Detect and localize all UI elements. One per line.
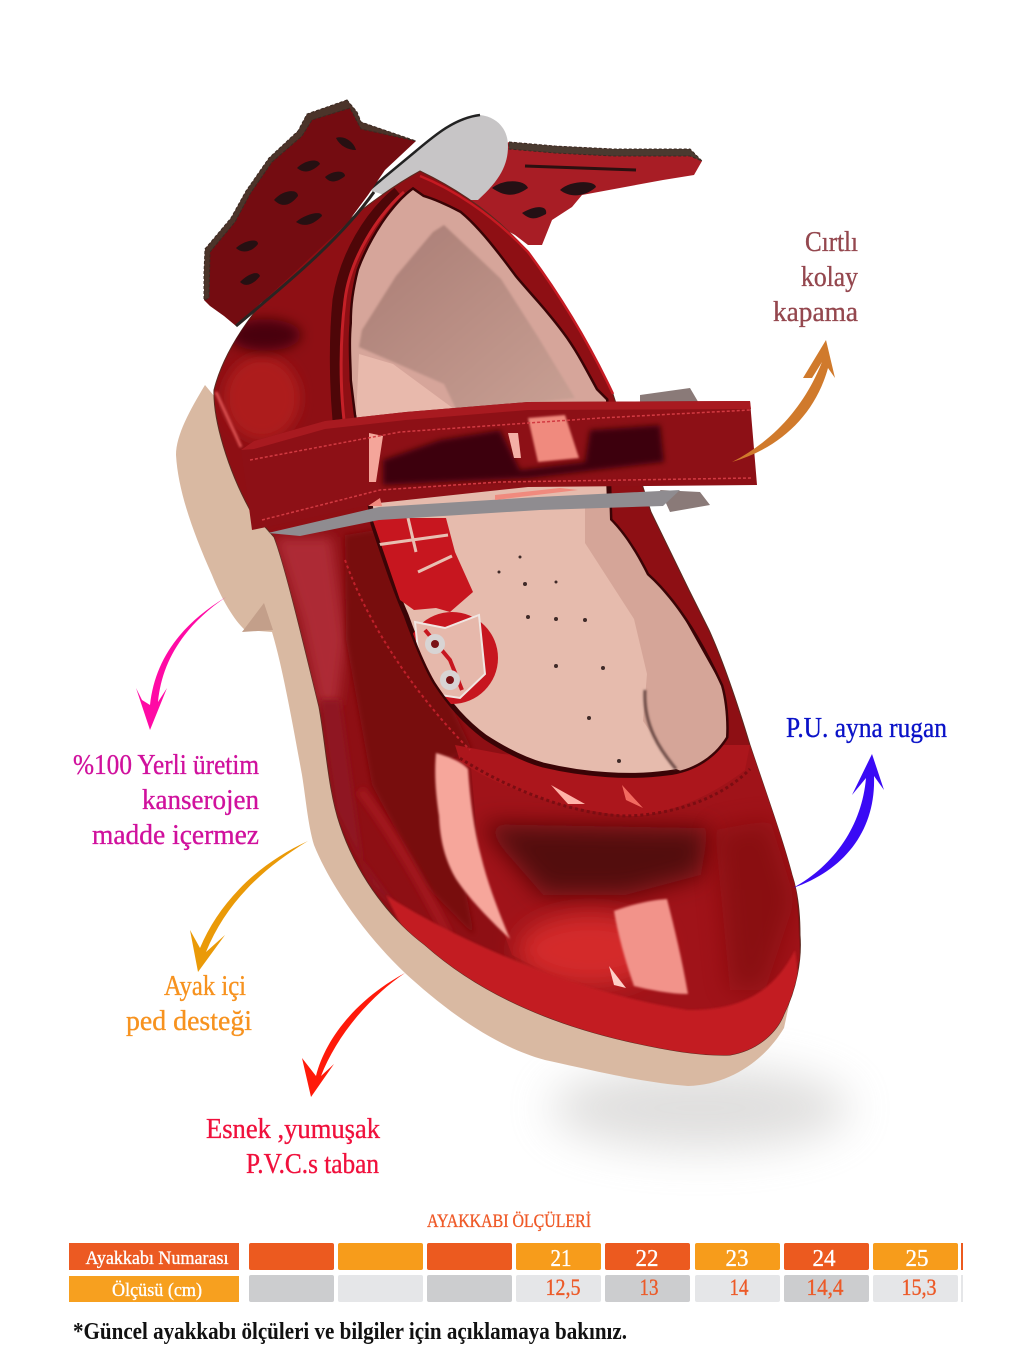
size number cells: 25 bbox=[906, 1246, 928, 1272]
label: Cırtlı kolay kapama bbox=[773, 226, 858, 328]
size number cells: 24 bbox=[812, 1246, 836, 1272]
strap underside bbox=[268, 490, 680, 536]
label: yerli uretim: madde içermez bbox=[92, 819, 259, 851]
photo: red patent leather shoe bbox=[176, 100, 805, 1086]
label: yerli uretim bbox=[73, 749, 259, 851]
label: Cırtlı kolay kapama: kolay bbox=[801, 261, 858, 293]
insole perforation dots bbox=[498, 556, 621, 763]
measure cells: 12,5 bbox=[546, 1275, 580, 1300]
size number cells: 22 bbox=[636, 1246, 658, 1272]
arrow: pink bbox=[136, 597, 226, 730]
label: Cırtlı kolay kapama: kapama bbox=[773, 296, 858, 328]
reflections on upper bbox=[216, 192, 805, 1066]
shoe opening rim bbox=[351, 190, 726, 775]
label: ayak ici bbox=[126, 970, 252, 1037]
size number cells bbox=[249, 1243, 963, 1272]
strap bbox=[241, 401, 757, 530]
heel shadow facet bbox=[242, 603, 273, 632]
measure cells bbox=[249, 1275, 963, 1302]
row label: measure: Ölçüsü (cm) bbox=[112, 1280, 202, 1301]
label: esnek: Esnek ,yumuşak bbox=[206, 1113, 380, 1145]
label: Cırtlı kolay kapama: Cırtlı bbox=[805, 226, 858, 258]
arrow: brown to closure label bbox=[732, 340, 835, 462]
collar stitch seam bbox=[455, 755, 750, 816]
footnote: *Güncel ayakkabı ölçüleri ve bilgiler için açıklamaya bakınız. bbox=[73, 1319, 627, 1345]
row label: shoe number bbox=[69, 1243, 239, 1270]
label: ayak ici: ped desteği bbox=[126, 1005, 252, 1037]
velcro grey tab bbox=[369, 115, 508, 200]
collar peak edge bbox=[420, 176, 613, 394]
size number cells: 21 bbox=[550, 1246, 572, 1272]
measure cells: 13 bbox=[640, 1275, 658, 1300]
row label: shoe number: Ayakkabı Numarası bbox=[86, 1248, 228, 1269]
right wing bbox=[450, 142, 702, 245]
insole logo bbox=[372, 518, 473, 612]
left wing bbox=[204, 100, 416, 326]
label: PU ayna rugan: P.U. ayna rugan bbox=[786, 712, 947, 744]
sole bbox=[176, 385, 790, 1086]
label: ayak ici: Ayak içi bbox=[164, 970, 246, 1002]
arrow: blue bbox=[793, 754, 884, 888]
shoe lining contents bbox=[345, 180, 730, 790]
measure cells: 14,4 bbox=[806, 1275, 844, 1300]
size table title: AYAKKABI ÖLÇÜLERİ bbox=[427, 1211, 591, 1232]
shoe shadow bbox=[550, 1066, 850, 1150]
label: esnek bbox=[206, 1113, 380, 1180]
label: esnek: P.V.C.s taban bbox=[246, 1148, 379, 1180]
row label: measure bbox=[69, 1276, 239, 1302]
measure cells: 15,3 bbox=[902, 1275, 936, 1300]
label: yerli uretim: %100 Yerli üretim bbox=[73, 749, 259, 781]
measure cells: 14 bbox=[730, 1275, 749, 1300]
size table bbox=[69, 1243, 963, 1302]
arrow: orange bbox=[190, 841, 308, 972]
vamp stitch line bbox=[345, 560, 470, 750]
arrow: red bbox=[302, 973, 405, 1097]
size number cells: 23 bbox=[726, 1246, 748, 1272]
label: yerli uretim: kanserojen bbox=[142, 784, 259, 816]
upper body bbox=[214, 171, 800, 1055]
buckle bbox=[640, 388, 710, 512]
